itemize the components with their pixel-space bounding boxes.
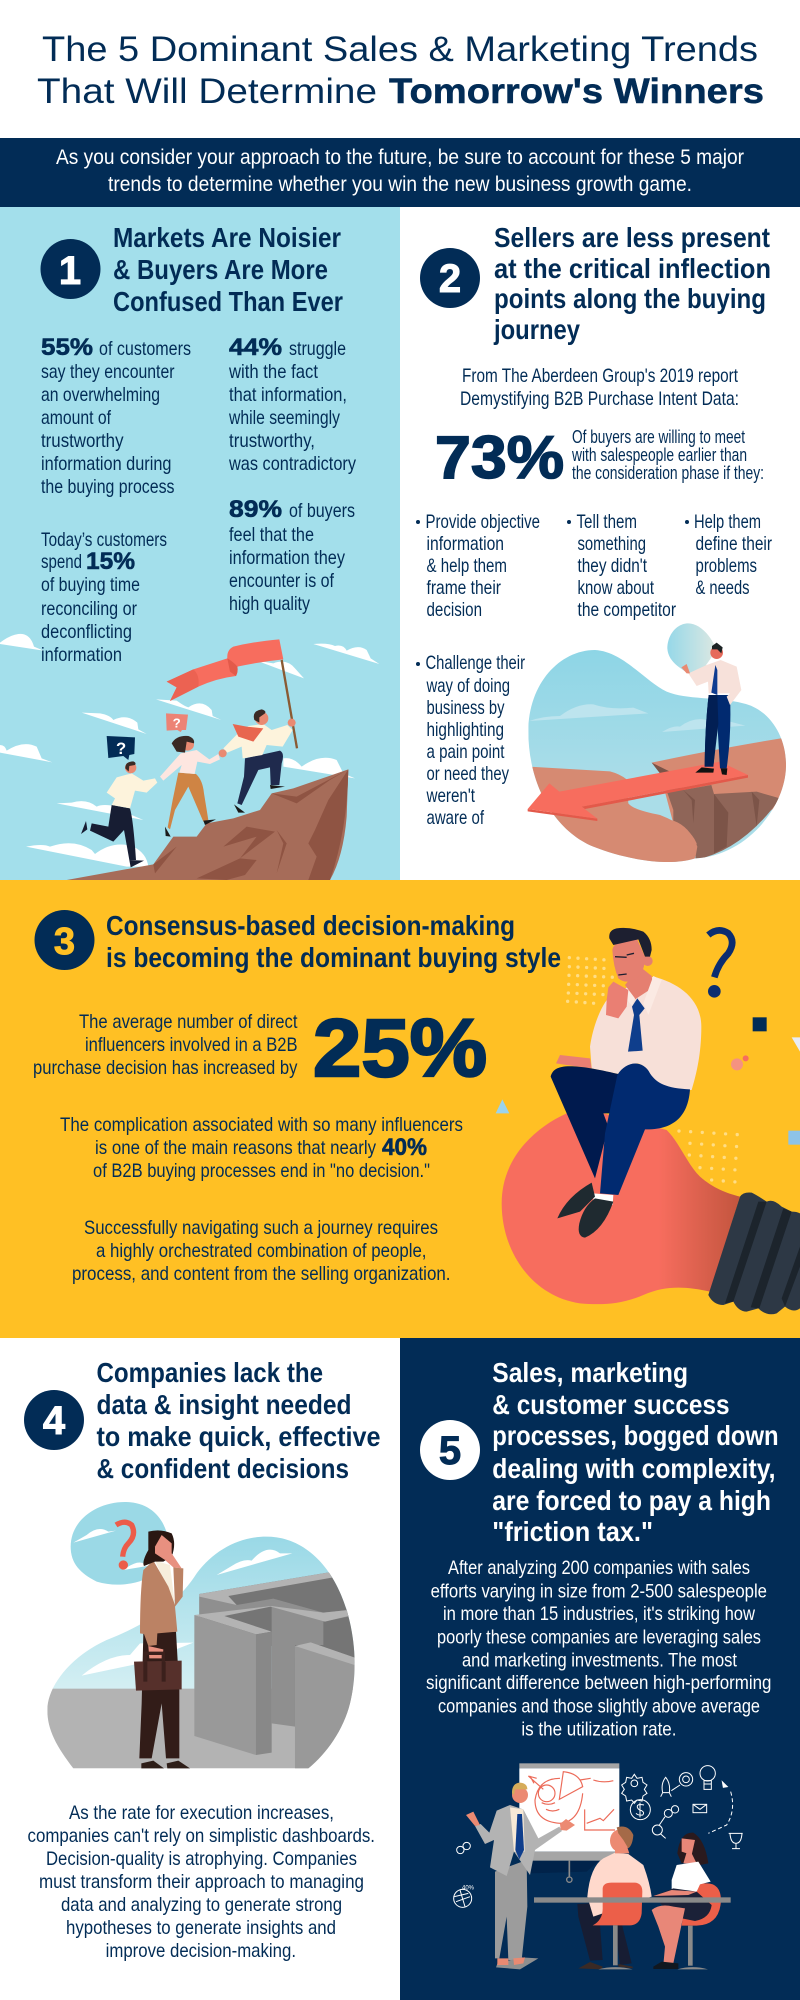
seated woman: [652, 1833, 721, 1969]
bullet: challenge their way: aware of: [426, 807, 484, 829]
heading 3: Consensus-based decision-making: [106, 910, 515, 941]
heading 5: & customer success: [492, 1389, 730, 1420]
bullet: provide objective information: information: [426, 533, 504, 555]
man: trousers: [551, 1064, 690, 1195]
stat: 15 percent: of buying time: [41, 574, 140, 596]
stat: 89 percent: encounter is of: [229, 570, 334, 592]
big stat 73 percent: 73%: [435, 424, 564, 491]
stat: 55 percent: 55%: [41, 334, 93, 361]
stat: 15 percent: 15%: [86, 548, 135, 575]
man: [681, 643, 741, 775]
heading 4: [96, 1357, 380, 1484]
stat description: Of buyers are willing to meet: [572, 427, 745, 447]
bullet: provide objective information: frame their: [426, 577, 501, 599]
body text 4: As the rate for execution increases,: [69, 1802, 334, 1824]
text: complication 40 percent: of B2B buying processes end in "no decision.": [93, 1160, 430, 1182]
arrow: [528, 762, 748, 821]
heading 5: are forced to pay a high: [492, 1485, 771, 1516]
number badge 5: [420, 1420, 480, 1480]
number badge 3: 3: [54, 921, 75, 963]
text: navigating the journey: Successfully navigating such a journey requires: [84, 1217, 438, 1239]
body text 5: in more than 15 industries, it's striking how: [443, 1603, 756, 1625]
dot patterns: [568, 958, 738, 1182]
text: navigating the journey: [72, 1217, 450, 1285]
stat: 55 percent: [41, 334, 191, 498]
bullet: tell them something: something: [578, 533, 646, 555]
whiteboard: [519, 1763, 619, 1882]
stat: 44 percent: trustworthy,: [229, 430, 315, 452]
stat: 55 percent: of customers: [99, 338, 191, 360]
stat: 44 percent: 44%: [229, 334, 282, 361]
illustration: team meeting at whiteboard: [454, 1763, 743, 1969]
bullet: help them define: Help them: [694, 511, 761, 533]
body text 5: [426, 1557, 771, 1741]
stat: 89 percent: of buyers: [289, 500, 355, 522]
heading 1: & Buyers Are More: [113, 254, 328, 285]
heading 1: [113, 222, 343, 317]
body text 5: After analyzing 200 companies with sales: [448, 1557, 750, 1579]
heading 5: [492, 1357, 779, 1547]
stat: 55 percent: say they encounter: [41, 361, 175, 383]
number badge 5: 5: [439, 1429, 461, 1473]
bullet: challenge their way: a pain point: [426, 741, 505, 763]
text: complication 40 percent: [60, 1114, 463, 1182]
heading 4: & confident decisions: [96, 1453, 349, 1484]
bullet: provide objective information: decision: [426, 599, 482, 621]
title: That Will Determine: [37, 72, 377, 111]
text: complication 40 percent: 40%: [382, 1134, 427, 1161]
white line icons: [454, 1766, 743, 1907]
stat: 44 percent: with the fact: [228, 361, 318, 383]
presenter: [466, 1783, 575, 1969]
man: shoes: [557, 1183, 613, 1238]
heading 3: is becoming the dominant buying style: [106, 942, 561, 973]
body text 5: and marketing investments. The most: [462, 1650, 737, 1672]
stat: 15 percent: spend: [41, 551, 82, 573]
bullet: help them define: problems: [696, 555, 757, 577]
bullet: challenge their way: business by: [426, 697, 505, 719]
bullet: provide objective information: & help them: [426, 555, 507, 577]
bullet: provide objective information: [416, 511, 540, 621]
stat: 55 percent: an overwhelming: [41, 384, 160, 406]
man: hand on knee: [556, 1055, 592, 1068]
heading 3: [106, 910, 561, 973]
intro banner: As you consider your approach to the future, be sure to account for these 5 major: [56, 146, 744, 169]
panel: trend 5 friction tax: [400, 1338, 800, 2000]
climber 2: [160, 736, 220, 837]
stat: 44 percent: struggle: [289, 338, 346, 360]
text: average number of influencers: [33, 1011, 298, 1079]
stat: 15 percent: deconflicting: [41, 621, 132, 643]
flag: [167, 639, 297, 748]
stat: 44 percent: that information,: [229, 384, 347, 406]
number badge 1: 1: [59, 249, 81, 293]
text: average number of influencers: The average number of direct: [79, 1011, 298, 1033]
source text: [460, 365, 739, 410]
heading 5: Sales, marketing: [492, 1357, 688, 1388]
stat: 89 percent: feel that the: [229, 524, 314, 546]
stat: 44 percent: [228, 334, 356, 475]
panel: trend 4 data and insight: [24, 1362, 380, 1961]
mountain: [67, 769, 348, 880]
stat: 15 percent: reconciling or: [41, 598, 137, 620]
number badge 2: [420, 248, 480, 308]
stat: 15 percent: Today’s customers: [41, 529, 167, 551]
title: [37, 30, 764, 111]
stat: 89 percent: 89%: [229, 496, 282, 523]
man: tie: [628, 998, 645, 1052]
bullet: challenge their way: way of doing: [426, 675, 510, 697]
maze walls: [194, 1572, 357, 1770]
heading 2: at the critical inflection: [494, 253, 771, 284]
body text 4: hypotheses to generate insights and: [66, 1917, 336, 1939]
number badge 4: 4: [43, 1399, 66, 1443]
bullet: help them define: & needs: [696, 577, 750, 599]
man: hand on chin: [606, 982, 628, 1018]
stat: 55 percent: information during: [41, 453, 172, 475]
bullet: challenge their way: or need they: [426, 763, 509, 785]
man: head: [609, 928, 653, 999]
bullet: challenge their way: weren't: [426, 785, 475, 807]
confetti shapes: [496, 1017, 800, 1145]
bullet: help them define: define their: [696, 533, 772, 555]
text: navigating the journey: process, and content from the selling organization.: [72, 1263, 450, 1285]
woman: [134, 1530, 190, 1768]
body text 5: is the utilization rate.: [521, 1719, 676, 1741]
stat: 55 percent: the buying process: [41, 476, 175, 498]
bullet: tell them something: Tell them: [576, 511, 637, 533]
bullet: tell them something: the competitor: [578, 599, 676, 621]
stat: 55 percent: amount of: [41, 407, 111, 429]
stat: 89 percent: information they: [229, 547, 345, 569]
bullet: tell them something: they didn't: [578, 555, 647, 577]
source text: Demystifying B2B Purchase Intent Data:: [460, 388, 739, 410]
intro banner: trends to determine whether you win the new business growth game.: [108, 173, 692, 196]
man: collar: [623, 976, 662, 1015]
heading 2: journey: [493, 314, 580, 345]
stat: 15 percent: information: [41, 644, 122, 666]
climber 1: [81, 761, 157, 867]
illustration: thinking man on light bulb: [496, 928, 800, 1314]
heading 5: "friction tax.": [492, 1516, 653, 1547]
white line icons: 40%: [462, 1885, 475, 1891]
stat description: [571, 427, 764, 483]
text: complication 40 percent: is one of the main reasons that nearly: [95, 1137, 376, 1159]
body text 4: improve decision-making.: [106, 1940, 296, 1962]
illustration: man on arrow over chasm: [523, 623, 790, 867]
text: navigating the journey: a highly orchestrated combination of people,: [96, 1240, 426, 1262]
stat: 44 percent: was contradictory: [228, 453, 356, 475]
heading 1: Confused Than Ever: [113, 286, 343, 317]
stat: 89 percent: [229, 496, 355, 615]
intro banner: [0, 138, 800, 207]
bullet: tell them something: know about: [578, 577, 654, 599]
text: average number of influencers: influencers involved in a B2B: [85, 1034, 298, 1056]
climber 3: [219, 709, 296, 813]
text: complication 40 percent: The complication associated with so many influencers: [60, 1114, 463, 1136]
body text 4: companies can't rely on simplistic dashboards.: [28, 1825, 375, 1847]
heading 2: [493, 222, 771, 345]
body text 4: [28, 1802, 375, 1962]
man: shirt: [590, 977, 701, 1090]
heading 2: Sellers are less present: [494, 222, 770, 253]
bullet: challenge their way: highlighting: [426, 719, 504, 741]
seated man: [577, 1827, 652, 1969]
body text 4: must transform their approach to managing: [39, 1871, 364, 1893]
decorative question mark: [708, 930, 732, 998]
heading 4: data & insight needed: [96, 1389, 352, 1420]
stat: 44 percent: while seemingly: [228, 407, 340, 429]
bullet: challenge their way: Challenge their: [426, 652, 525, 674]
illustration: climbers on mountain with flag: [0, 634, 379, 880]
panel: trend 1 markets are noisier: [0, 207, 400, 880]
red question mark: [116, 1522, 134, 1570]
stat: 55 percent: trustworthy: [41, 430, 124, 452]
light bulb: [502, 1113, 740, 1304]
heading 4: Companies lack the: [96, 1357, 323, 1388]
bullet: help them define: [685, 511, 772, 599]
number badge 1: [40, 239, 100, 299]
question bubbles: [107, 713, 188, 760]
table: [534, 1897, 731, 1903]
bullet: provide objective information: Provide objective: [426, 511, 540, 533]
body text 4: data and analyzing to generate strong: [61, 1894, 342, 1916]
stat: 15 percent: [41, 529, 167, 666]
heading 1: Markets Are Noisier: [113, 222, 341, 253]
number badge 2: 2: [439, 257, 461, 301]
number badge 3: [34, 910, 94, 970]
panel: trend 3 consensus: [0, 880, 800, 1338]
bullet: tell them something: [567, 511, 676, 621]
panel: trend 2 sellers less present: [416, 222, 790, 867]
illustration: woman facing maze: [40, 1502, 373, 1770]
question bubbles: ?: [173, 716, 181, 731]
stat description: with salespeople earlier than: [571, 445, 747, 465]
title: Tomorrow's Winners: [389, 72, 764, 111]
bullet: challenge their way: [416, 652, 525, 829]
stat: 89 percent: high quality: [229, 593, 310, 615]
body text 4: Decision-quality is atrophying. Companies: [46, 1848, 357, 1870]
question bubbles: ?: [116, 739, 126, 758]
heading 4: to make quick, effective: [96, 1421, 380, 1452]
big stat 25 percent: 25%: [313, 1003, 487, 1094]
bulb base: [708, 1192, 800, 1314]
text: average number of influencers: purchase decision has increased by: [33, 1057, 298, 1079]
number badge 4: [24, 1390, 84, 1450]
title: The 5 Dominant Sales & Marketing Trends: [42, 30, 758, 69]
